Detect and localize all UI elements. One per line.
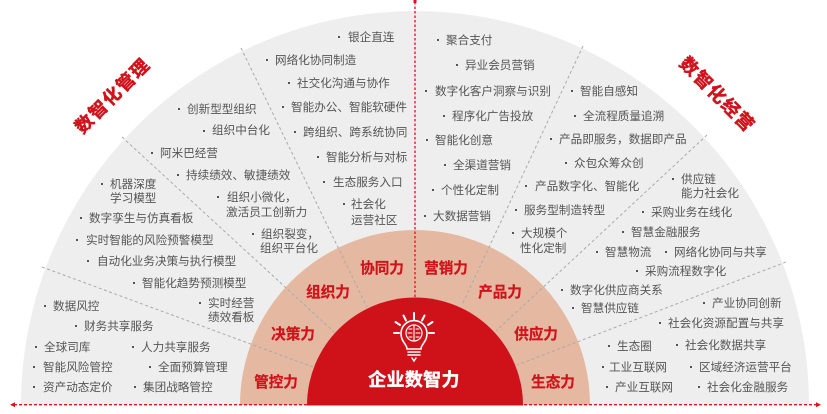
list item: 智能化创意 (435, 133, 493, 147)
list item (199, 296, 255, 324)
capability label: marketing: 营销力 (424, 259, 468, 277)
panel: organisation items (151, 102, 319, 255)
list item (101, 177, 157, 205)
list item: 数字孪生与仿真看板 (89, 211, 194, 225)
list item: 银企直连 (348, 30, 395, 44)
red core semicircle (307, 298, 523, 406)
list item: 人力共享服务 (141, 340, 211, 354)
list item: 能力社会化 (681, 186, 739, 200)
list item: 实时经营 (208, 296, 254, 310)
list item: 持续绩效、敏捷绩效 (186, 168, 291, 182)
list item: 自动化业务决策与执行模型 (97, 254, 237, 268)
list item: 全渠道营销 (453, 158, 511, 172)
list item: 社会化金融服务 (707, 380, 789, 394)
list item: 生态服务入口 (333, 175, 403, 189)
list item: 全球司库 (44, 340, 91, 354)
capability label: supply: 供应力 (514, 325, 558, 343)
core label: 企业数智力 (368, 369, 460, 390)
list item: 智能风险管控 (43, 360, 113, 374)
list item: 数字化客户洞察与识别 (435, 84, 551, 98)
list item: 产品即服务，数据即产品 (559, 132, 687, 146)
list item: 机器深度 (110, 177, 157, 191)
list item (672, 172, 739, 200)
panel: ecosystem items (602, 296, 792, 394)
list item: 组织小微化， (227, 190, 297, 204)
panel: decision items (76, 177, 255, 324)
title: digital management: 数智化管理 (71, 54, 154, 137)
list item: 财务共享服务 (84, 319, 154, 333)
list item: 智能分析与对标 (326, 150, 408, 164)
list item: 智能办公、智能软硬件 (291, 100, 407, 114)
list item: 供应链 (681, 172, 716, 186)
list item: 数据风控 (53, 299, 100, 313)
panel: product items (512, 84, 687, 255)
list item: 智慧供应链 (581, 301, 639, 315)
list item: 数字化供应商关系 (570, 283, 663, 297)
list item: 跨组织、跨系统协同 (303, 125, 407, 139)
list item: 全面预算管理 (158, 360, 228, 374)
list item: 实时智能的风险预警模型 (86, 233, 214, 247)
list item: 产业协同创新 (712, 296, 782, 310)
capability label: collaboration: 协同力 (360, 260, 404, 277)
list item (252, 227, 319, 255)
list item: 学习模型 (110, 191, 157, 205)
list item: 大规模个 (521, 226, 568, 240)
list item: 绩效看板 (208, 310, 255, 324)
list item: 采购流程数字化 (645, 264, 727, 278)
list item: 社交化沟通与协作 (297, 76, 390, 90)
arrow: vertical axis (414, 0, 416, 298)
list item: 运营社区 (351, 213, 398, 227)
capability label: control: 管控力 (254, 373, 298, 391)
salmon capability ring (240, 230, 590, 405)
list item: 个性化定制 (441, 183, 499, 197)
list item: 程序化广告投放 (452, 109, 534, 123)
list item: 全流程质量追溯 (583, 109, 664, 123)
list item: 组织中台化 (212, 123, 270, 137)
list item: 异业会员营销 (465, 58, 535, 72)
list item: 社会化 (351, 197, 386, 211)
list item: 社会化资源配置与共享 (668, 316, 784, 330)
list item: 智慧金融服务 (631, 225, 701, 239)
list item: 集团战略管控 (143, 380, 213, 394)
list item: 众包众筹众创 (574, 156, 644, 170)
list item: 性化定制 (520, 241, 566, 255)
list item: 智慧物流 (605, 245, 652, 259)
arrow: horizontal axis (10, 402, 821, 407)
list item: 工业互联网 (609, 360, 667, 374)
list item: 聚合支付 (446, 33, 493, 47)
panel: supply items (561, 172, 767, 315)
list item: 组织平台化 (260, 241, 318, 255)
capability label: ecosystem: 生态力 (531, 373, 575, 391)
list item: 激活员工创新力 (226, 205, 307, 219)
list item: 社会化数据共享 (685, 338, 766, 352)
capability label: organisation: 组织力 (306, 284, 350, 301)
list item (512, 226, 568, 255)
list item: 服务型制造转型 (524, 203, 606, 217)
list item: 产业互联网 (615, 380, 673, 394)
list item: 智能自感知 (580, 84, 638, 98)
list item: 智能化趋势预测模型 (142, 276, 247, 290)
list item (217, 190, 307, 219)
panel: marketing items (424, 33, 551, 223)
panel: control items (33, 299, 228, 394)
list item: 产品数字化、智能化 (535, 179, 640, 193)
list item: 网络化协同与共享 (674, 245, 767, 259)
list item: 区域经济运营平台 (699, 360, 792, 374)
list item: 组织裂变， (261, 227, 319, 241)
capability label: product: 产品力 (478, 284, 522, 301)
list item: 阿米巴经营 (160, 146, 218, 160)
panel: collaboration items (266, 30, 408, 227)
list item: 采购业务在线化 (651, 205, 733, 219)
list item: 大数据营销 (433, 209, 491, 223)
list item (343, 197, 398, 227)
title: digital operations: 数智化经营 (676, 53, 759, 136)
list item: 创新型型组织 (187, 102, 257, 116)
list item: 资产动态定价 (43, 380, 113, 394)
list item: 生态圈 (617, 339, 652, 353)
capability label: decision: 决策力 (271, 325, 315, 343)
list item: 网络化协同制造 (275, 53, 357, 67)
icon: light bulb with brain (394, 313, 434, 361)
